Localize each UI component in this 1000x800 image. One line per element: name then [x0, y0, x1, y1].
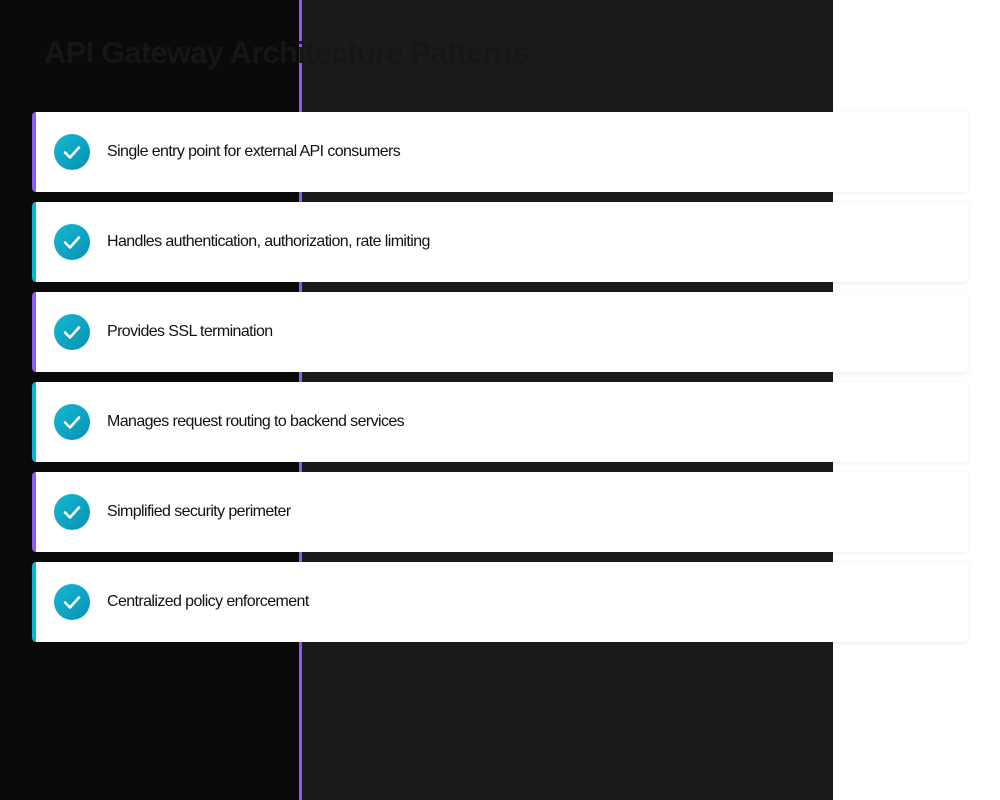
title: API Gateway Architecture Patterns	[44, 35, 528, 70]
card 2: Handles authentication, authorization, rate limiting	[107, 233, 430, 250]
card 4: Manages request routing to backend services	[107, 413, 404, 430]
icon: check	[54, 494, 90, 530]
card 2	[32, 202, 968, 282]
card 6: Centralized policy enforcement	[107, 593, 309, 610]
card 1: Single entry point for external API consumers	[107, 143, 400, 160]
card 6	[32, 562, 968, 642]
icon: check	[54, 224, 90, 260]
card 5: Simplified security perimeter	[107, 503, 291, 520]
card 3: Provides SSL termination	[107, 323, 273, 340]
icon: check	[54, 404, 90, 440]
card 3	[32, 292, 968, 372]
icon: check	[54, 314, 90, 350]
icon: check	[54, 584, 90, 620]
card 1	[32, 112, 968, 192]
icon: check	[54, 134, 90, 170]
card 5	[32, 472, 968, 552]
card 4	[32, 382, 968, 462]
